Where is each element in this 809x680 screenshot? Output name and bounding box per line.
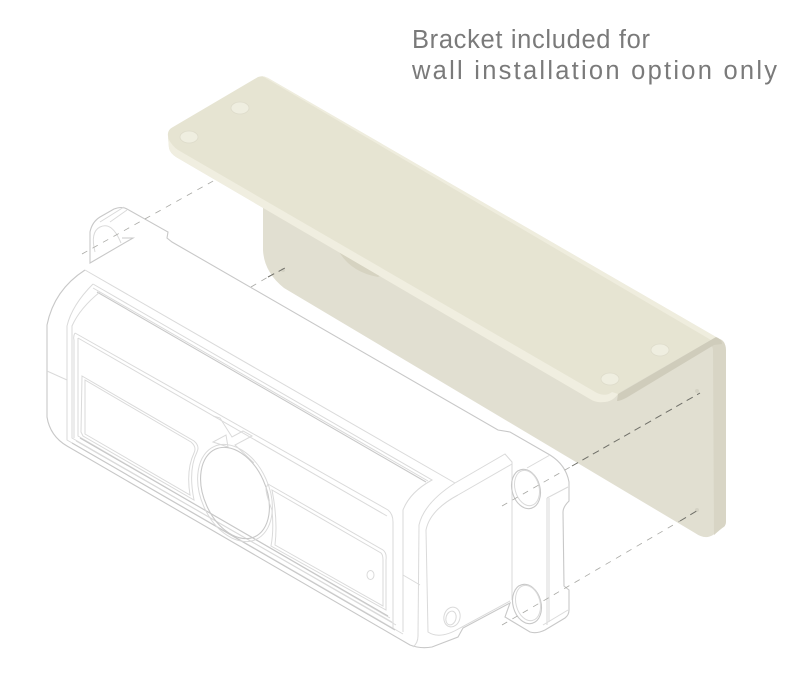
front recess: [67, 284, 432, 634]
bracket vertical plate: [263, 205, 725, 537]
mounting lug: [93, 226, 121, 252]
centre knob: [187, 437, 283, 549]
device outline: [47, 207, 569, 648]
end face holes: [507, 466, 545, 512]
caption: bracket note: Bracket included for: [412, 26, 650, 54]
end face: [413, 483, 455, 647]
right display: [266, 484, 386, 610]
screw port: [442, 605, 462, 629]
indicator dot: [367, 570, 374, 580]
bracket right side bevel: [709, 338, 726, 535]
housing silhouette: [47, 208, 569, 648]
bracket plate holes: [281, 268, 699, 512]
dashed alignment lines: [82, 180, 700, 625]
control panel frame: [74, 333, 393, 628]
bracket top plate: [168, 76, 716, 402]
bracket fold shadow: [617, 337, 722, 401]
bracket top holes: [180, 102, 669, 385]
bracket back edge highlight: [262, 76, 716, 340]
X logo: [213, 416, 254, 463]
bracket top plate front edge: [168, 138, 618, 402]
caption: bracket note: wall installation option only: [411, 57, 777, 85]
top face front edge: [85, 270, 455, 483]
bracket rear curved recess: [338, 250, 392, 277]
caption: bracket note: [411, 26, 777, 85]
wall bracket: [168, 76, 726, 537]
left display: [81, 376, 198, 500]
bottom ridges: [80, 438, 388, 616]
